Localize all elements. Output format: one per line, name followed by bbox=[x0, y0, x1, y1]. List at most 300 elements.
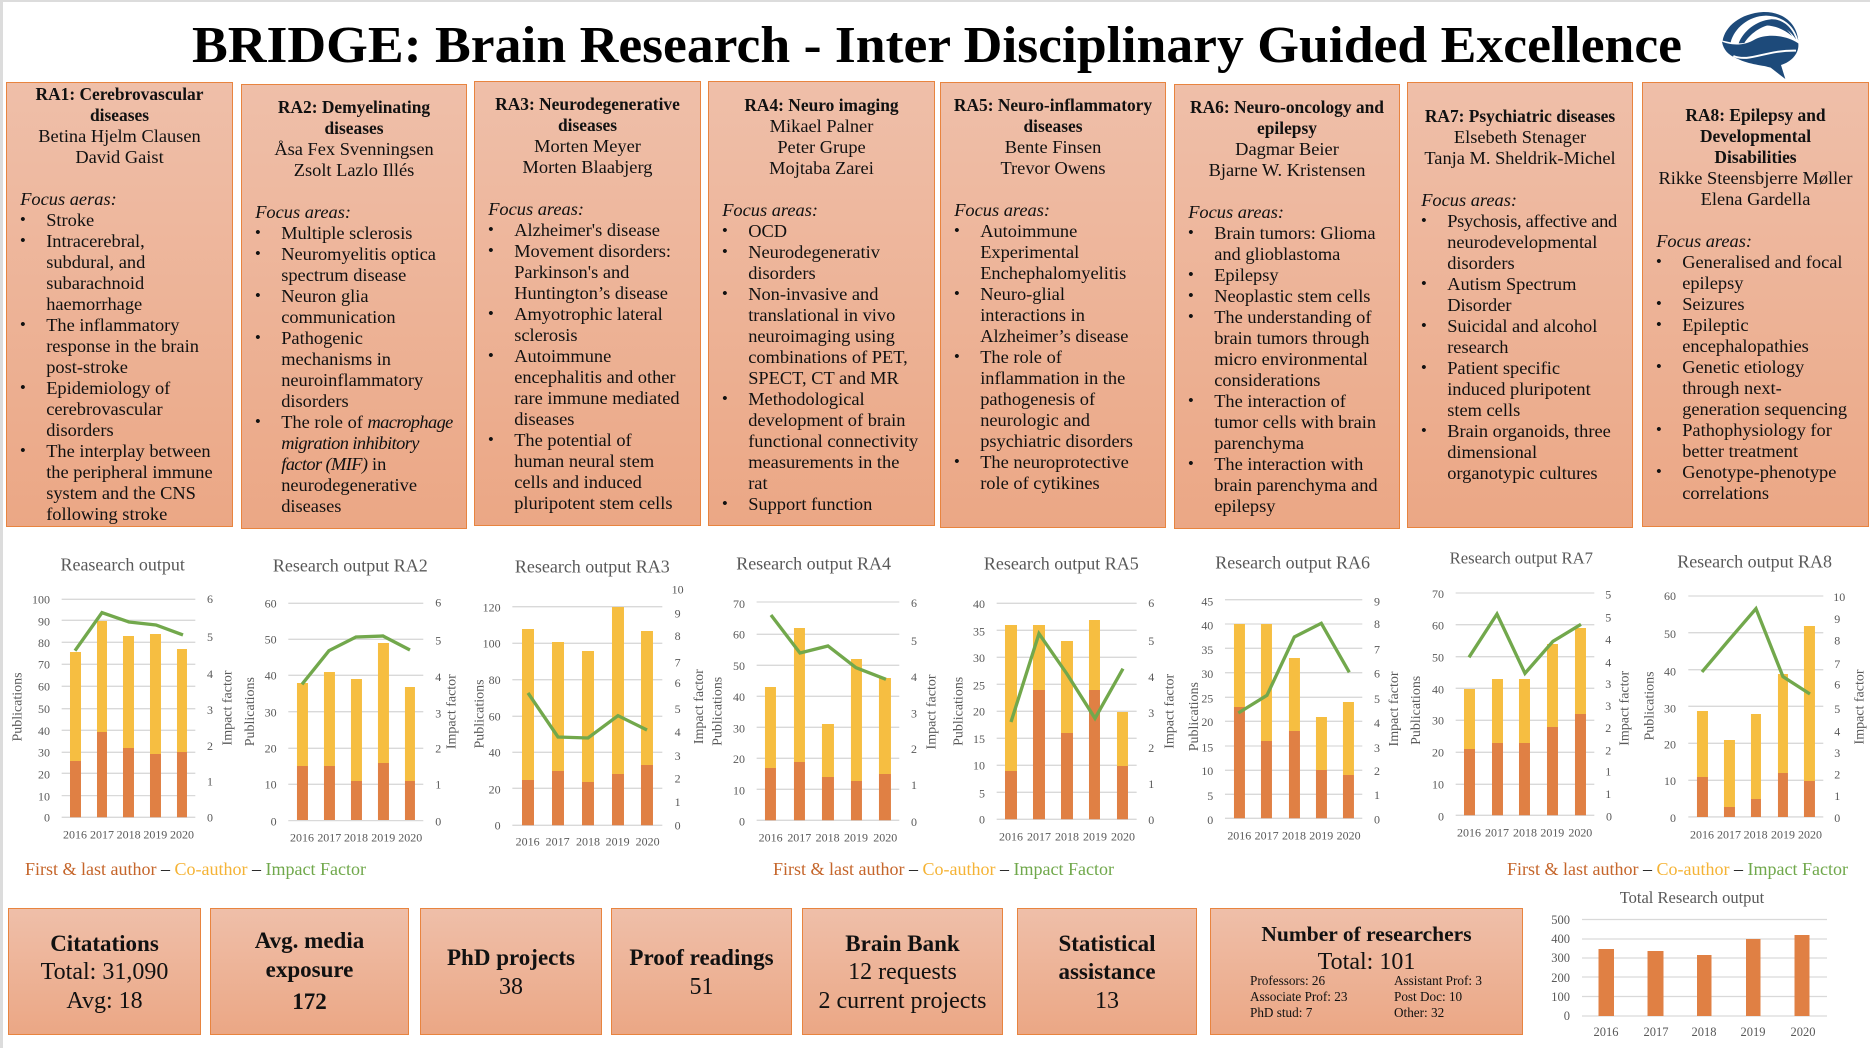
year labels: 2019 bbox=[143, 827, 167, 841]
left axis labels: 30 bbox=[1201, 667, 1213, 681]
list: RA4 focus areas bbox=[722, 221, 918, 514]
chart: Research output RA8 bbox=[1642, 552, 1867, 842]
list: RA2 focus areas: communication bbox=[281, 306, 396, 326]
impact factor axis title: Impact factor bbox=[1387, 671, 1402, 746]
list: RA6 focus areas: brain tumors through bbox=[1214, 328, 1369, 348]
list: RA2 focus areas bbox=[256, 222, 453, 516]
right axis labels: 2 bbox=[675, 772, 681, 786]
stat panel: number of researchers bbox=[1210, 908, 1523, 1035]
list: RA8 focus areas: Seizures bbox=[1682, 294, 1744, 314]
list: RA6 focus areas: Epilepsy bbox=[1214, 265, 1279, 285]
list: RA5 focus areas: pathogenesis of bbox=[980, 389, 1095, 409]
researcher breakdown column 1: Professors: 26 bbox=[1250, 973, 1325, 988]
heading: RA3 title and leaders: Morten Blaabjerg bbox=[523, 157, 652, 177]
list: RA1 focus areas: system and the CNS bbox=[46, 483, 196, 503]
co-author bars bbox=[1697, 626, 1815, 807]
chart title: Research output RA4 bbox=[736, 554, 891, 574]
left axis labels: 25 bbox=[1201, 692, 1213, 706]
panel: RA3 Neurodegenerative diseases bbox=[474, 81, 701, 526]
left axis labels bbox=[32, 592, 50, 825]
heading: RA6 title and leaders: epilepsy bbox=[1257, 118, 1317, 138]
year labels: 2017 bbox=[1717, 828, 1741, 842]
list: RA8 focus areas: Generalised and focal bbox=[1682, 252, 1843, 272]
left axis labels: 0 bbox=[1670, 811, 1676, 825]
heading: RA4 title and leaders: RA4: Neuro imaging bbox=[744, 95, 899, 115]
year labels: 2018 bbox=[1282, 828, 1306, 842]
heading: RA7 title and leaders: RA7: Psychiatric diseases bbox=[1425, 106, 1615, 126]
right axis labels: 2 bbox=[1374, 764, 1380, 778]
list: RA1 focus areas: disorders bbox=[46, 420, 114, 440]
year labels: 2020 bbox=[170, 827, 194, 841]
heading: RA8 title and leaders bbox=[1658, 105, 1853, 209]
list: RA4 focus areas: measurements in the bbox=[748, 452, 899, 472]
label: focus areas RA3: Focus areas: bbox=[488, 199, 584, 219]
right axis labels: 7 bbox=[1374, 643, 1380, 657]
heading: RA5 title and leaders bbox=[954, 95, 1152, 178]
year labels: 2020 bbox=[636, 834, 660, 848]
chart title: Research output RA3 bbox=[515, 556, 670, 576]
list: RA7 focus areas: Disorder bbox=[1447, 295, 1512, 315]
left axis labels: 0 bbox=[1564, 1009, 1570, 1023]
right axis labels: 6 bbox=[675, 676, 681, 690]
label: focus areas RA5: Focus areas: bbox=[954, 200, 1050, 220]
left axis labels: 40 bbox=[973, 597, 985, 611]
right axis labels: 7 bbox=[1834, 657, 1840, 671]
heading: RA2 title and leaders: RA2: Demyelinating bbox=[278, 96, 430, 116]
right axis labels: 7 bbox=[675, 655, 681, 669]
left axis labels: 50 bbox=[1432, 651, 1444, 665]
list: RA3 focus areas: human neural stem bbox=[514, 451, 654, 471]
left axis labels: 10 bbox=[38, 789, 50, 803]
stat panel: citations bbox=[8, 908, 201, 1035]
list: RA6 focus areas: The interaction of bbox=[1214, 391, 1346, 411]
heading: RA6 title and leaders: Dagmar Beier bbox=[1235, 139, 1339, 159]
year labels: 2017 bbox=[1644, 1025, 1668, 1039]
left axis labels: 20 bbox=[1201, 715, 1213, 729]
right axis labels: 1 bbox=[1605, 765, 1611, 779]
list: RA8 focus areas bbox=[1656, 252, 1847, 503]
stat panel: number of researchers: Total: 101 bbox=[1318, 948, 1415, 974]
impact factor axis title: Impact factor bbox=[692, 669, 707, 744]
co-author bars bbox=[1464, 628, 1586, 749]
left axis labels: 10 bbox=[733, 783, 745, 797]
right axis labels: 1 bbox=[911, 778, 917, 792]
publications axis title: Publications bbox=[1409, 676, 1424, 745]
list: RA1 focus areas: following stroke bbox=[46, 504, 167, 524]
year labels: 2019 bbox=[1309, 828, 1333, 842]
year labels bbox=[63, 827, 194, 841]
left axis labels bbox=[1664, 589, 1676, 825]
year labels bbox=[759, 830, 897, 844]
right axis labels: 6 bbox=[435, 596, 441, 610]
list: RA7 focus areas: disorders bbox=[1447, 253, 1515, 273]
heading: RA3 title and leaders: Morten Meyer bbox=[534, 136, 641, 156]
list: RA1 focus areas: subdural, and bbox=[46, 252, 145, 272]
year labels: 2016 bbox=[516, 834, 540, 848]
impact factor line bbox=[1469, 614, 1581, 673]
impact factor line bbox=[1238, 623, 1349, 713]
stat panel: statistical assistance: assistance bbox=[1058, 959, 1156, 984]
year labels: 2018 bbox=[344, 830, 368, 844]
impact factor line bbox=[302, 636, 410, 684]
stat panel: proof readings: Proof readings bbox=[629, 945, 774, 970]
left axis labels: 60 bbox=[733, 628, 745, 642]
left axis labels: 10 bbox=[1664, 774, 1676, 788]
right axis labels bbox=[1374, 594, 1380, 827]
list: RA3 focus areas: Autoimmune bbox=[514, 346, 611, 366]
right axis labels: 4 bbox=[1834, 724, 1840, 738]
stat panel: statistical assistance: Statistical bbox=[1058, 931, 1156, 956]
chart title: Research output RA7 bbox=[1450, 549, 1593, 568]
chart: Research output RA3 bbox=[472, 556, 707, 848]
list: RA2 focus areas: Multiple sclerosis bbox=[281, 222, 412, 242]
left axis labels: 20 bbox=[38, 768, 50, 782]
left axis labels: 20 bbox=[1432, 746, 1444, 760]
right axis labels: 5 bbox=[1148, 634, 1154, 648]
heading: RA4 title and leaders: Peter Grupe bbox=[777, 137, 866, 157]
publications axis title: Publications bbox=[472, 679, 487, 749]
left axis labels: 60 bbox=[1664, 589, 1676, 603]
left axis labels: 35 bbox=[973, 624, 985, 638]
right axis labels: 5 bbox=[675, 702, 681, 716]
year labels bbox=[999, 829, 1135, 843]
right axis labels: 5 bbox=[207, 630, 213, 644]
year labels: 2019 bbox=[371, 830, 395, 844]
right axis labels: 3 bbox=[1834, 746, 1840, 760]
year labels: 2019 bbox=[1740, 1025, 1766, 1039]
year labels: 2017 bbox=[546, 834, 570, 848]
right axis labels: 5 bbox=[1374, 692, 1380, 706]
publications axis title: Publications bbox=[243, 677, 258, 746]
list: RA5 focus areas: inflammation in the bbox=[980, 368, 1125, 388]
impact factor line bbox=[771, 615, 886, 679]
year labels: 2020 bbox=[1111, 829, 1135, 843]
right axis labels: 3 bbox=[1148, 706, 1154, 720]
right axis labels: 0 bbox=[1148, 813, 1154, 827]
list: RA1 focus areas: The interplay between bbox=[46, 441, 211, 461]
list: RA1 focus areas: subarachnoid bbox=[46, 273, 144, 293]
label: focus areas RA4: Focus areas: bbox=[722, 200, 818, 220]
right axis labels: 2 bbox=[1148, 741, 1154, 755]
list: RA7 focus areas: Psychosis, affective and bbox=[1447, 211, 1617, 231]
year labels: 2019 bbox=[1540, 826, 1564, 840]
list: RA3 focus areas: pluripotent stem cells bbox=[514, 493, 673, 513]
left axis labels: 30 bbox=[973, 651, 985, 665]
right axis labels: 1 bbox=[1834, 789, 1840, 803]
list: RA8 focus areas: Pathophysiology for bbox=[1682, 420, 1832, 440]
list: RA8 focus areas: Epileptic bbox=[1682, 315, 1749, 335]
left axis labels: 70 bbox=[733, 597, 745, 611]
right axis labels: 0 bbox=[1374, 813, 1380, 827]
right axis labels: 8 bbox=[1834, 633, 1840, 647]
right axis labels: 2 bbox=[1605, 743, 1611, 757]
left axis labels: 120 bbox=[483, 601, 501, 615]
panel: RA8 Epilepsy and Developmental Disabilities bbox=[1642, 82, 1869, 527]
heading: RA7 title and leaders bbox=[1424, 106, 1616, 168]
legend 1: First & last author – Co-author – Impact Factor bbox=[25, 859, 366, 879]
list: RA5 focus areas: interactions in bbox=[980, 305, 1085, 325]
chart: Research output RA5 bbox=[951, 554, 1177, 843]
right axis labels: 4 bbox=[1605, 655, 1611, 669]
co-author bars bbox=[765, 628, 891, 781]
left axis labels: 10 bbox=[265, 778, 277, 792]
list: RA8 focus areas: correlations bbox=[1682, 483, 1769, 503]
left axis labels: 30 bbox=[265, 706, 277, 720]
impact factor line bbox=[75, 613, 183, 651]
heading: RA1 title and leaders: RA1: Cerebrovascular bbox=[36, 84, 203, 104]
heading: RA4 title and leaders bbox=[744, 95, 899, 178]
heading: RA4 title and leaders: Mikael Palner bbox=[770, 116, 873, 136]
year labels: 2017 bbox=[90, 827, 114, 841]
right axis labels: 0 bbox=[1834, 811, 1840, 825]
list: RA3 focus areas: sclerosis bbox=[514, 325, 578, 345]
left axis labels: 50 bbox=[265, 633, 277, 647]
left axis labels bbox=[265, 596, 277, 829]
list: RA2 focus areas: factor (MIF) in bbox=[281, 454, 386, 474]
right axis labels: 3 bbox=[1374, 741, 1380, 755]
chart: Research output RA7 bbox=[1409, 549, 1633, 840]
stat panel: proof readings: 51 bbox=[690, 974, 714, 1000]
list: RA6 focus areas: brain parenchyma and bbox=[1214, 475, 1378, 495]
left axis labels bbox=[1551, 913, 1570, 1023]
label: focus areas RA6: Focus areas: bbox=[1188, 202, 1284, 222]
year labels bbox=[290, 830, 422, 844]
first and last author bars bbox=[70, 732, 187, 817]
year labels: 2019 bbox=[606, 834, 630, 848]
right axis labels: 1 bbox=[1374, 788, 1380, 802]
right axis labels: 4 bbox=[1374, 716, 1380, 730]
list: RA3 focus areas: Movement disorders: bbox=[514, 241, 671, 261]
left axis labels: 40 bbox=[1432, 683, 1444, 697]
panel: RA4 Neuro imaging bbox=[708, 81, 935, 526]
list: RA2 focus areas: spectrum disease bbox=[281, 264, 406, 284]
stat panel: citations: Avg: 18 bbox=[66, 988, 143, 1014]
heading: RA2 title and leaders: diseases bbox=[325, 118, 383, 138]
left axis labels: 100 bbox=[483, 637, 501, 651]
chart: Research output RA6 bbox=[1187, 553, 1402, 842]
researcher breakdown column 1: Associate Prof: 23 bbox=[1250, 989, 1347, 1004]
list: RA7 focus areas: research bbox=[1447, 337, 1508, 357]
panel: RA7 Psychiatric diseases bbox=[1407, 82, 1633, 528]
left axis labels: 70 bbox=[38, 658, 50, 672]
list: RA2 focus areas: diseases bbox=[281, 496, 341, 516]
list: RA2 focus areas: disorders bbox=[281, 390, 349, 410]
left axis labels: 30 bbox=[1432, 714, 1444, 728]
left axis labels bbox=[733, 597, 745, 829]
heading: RA1 title and leaders: Betina Hjelm Clausen bbox=[38, 126, 201, 146]
researcher breakdown column 2: Post Doc: 10 bbox=[1394, 989, 1462, 1004]
heading: RA8 title and leaders: Disabilities bbox=[1714, 147, 1797, 167]
list: RA4 focus areas: OCD bbox=[748, 221, 787, 241]
left axis labels: 0 bbox=[979, 813, 985, 827]
left axis labels: 300 bbox=[1551, 951, 1570, 965]
year labels: 2019 bbox=[844, 830, 868, 844]
heading: RA6 title and leaders bbox=[1190, 97, 1384, 180]
list: RA4 focus areas: SPECT, CT and MR bbox=[748, 368, 899, 388]
list: RA4 focus areas: combinations of PET, bbox=[748, 347, 908, 367]
left axis labels: 50 bbox=[1664, 627, 1676, 641]
list: RA4 focus areas: functional connectivity bbox=[748, 431, 918, 451]
impact factor axis title: Impact factor bbox=[445, 674, 460, 749]
stat panel: statistical assistance: 13 bbox=[1095, 988, 1119, 1014]
right axis labels: 3 bbox=[207, 703, 213, 717]
list: RA6 focus areas: The interaction with bbox=[1214, 454, 1363, 474]
left axis labels bbox=[973, 597, 985, 827]
right axis labels: 0 bbox=[435, 815, 441, 829]
stat panel: brain bank: Brain Bank bbox=[845, 931, 960, 956]
list: RA1 focus areas: response in the brain bbox=[46, 336, 199, 356]
list: RA6 focus areas: and glioblastoma bbox=[1214, 244, 1340, 264]
list: RA1 focus areas: Epidemiology of bbox=[46, 378, 170, 398]
panel: RA5 Neuro-inflammatory diseases bbox=[940, 82, 1166, 528]
year labels: 2016 bbox=[63, 827, 87, 841]
right axis labels bbox=[911, 596, 917, 829]
list: RA3 focus areas: encephalitis and other bbox=[514, 367, 676, 387]
year labels: 2018 bbox=[117, 827, 141, 841]
right axis labels bbox=[435, 596, 441, 829]
list: RA5 focus areas: neurologic and bbox=[980, 410, 1090, 430]
list: RA4 focus areas: Non-invasive and bbox=[748, 284, 878, 304]
list: RA1 focus areas: haemorrhage bbox=[46, 294, 142, 314]
list: RA5 focus areas: Autoimmune bbox=[980, 221, 1077, 241]
researcher breakdown column 2: Other: 32 bbox=[1394, 1005, 1444, 1020]
chart: Research output RA2 bbox=[243, 556, 460, 844]
list: RA6 focus areas: Neoplastic stem cells bbox=[1214, 286, 1370, 306]
right axis labels: 3 bbox=[1605, 699, 1611, 713]
heading: RA7 title and leaders: Elsebeth Stenager bbox=[1454, 127, 1586, 147]
left axis labels: 50 bbox=[38, 702, 50, 716]
right axis labels: 1 bbox=[1148, 777, 1154, 791]
list: RA4 focus areas: Methodological bbox=[748, 389, 865, 409]
chart title: Research output RA6 bbox=[1215, 553, 1370, 573]
year labels: 2020 bbox=[1790, 1025, 1816, 1039]
list: RA1 focus areas bbox=[20, 210, 213, 524]
left axis labels: 40 bbox=[265, 669, 277, 683]
heading: RA1 title and leaders: David Gaist bbox=[75, 147, 164, 167]
right axis labels: 5 bbox=[911, 634, 917, 648]
right axis labels: 8 bbox=[675, 629, 681, 643]
year labels: 2018 bbox=[1744, 828, 1768, 842]
impact factor axis title: Impact factor bbox=[1618, 671, 1633, 746]
right axis labels: 8 bbox=[1374, 617, 1380, 631]
list: RA8 focus areas: Genetic etiology bbox=[1682, 357, 1804, 377]
heading: RA5 title and leaders: RA5: Neuro-inflammatory bbox=[954, 95, 1152, 115]
stat panel: brain bank: 12 requests bbox=[848, 959, 957, 985]
publications axis title: Publications bbox=[951, 677, 966, 746]
left axis labels: 40 bbox=[489, 746, 501, 760]
first and last author bars bbox=[765, 762, 891, 820]
list: RA5 focus areas: Enchephalomyelitis bbox=[980, 263, 1126, 283]
list: RA1 focus areas: Stroke bbox=[46, 210, 94, 230]
left axis labels: 200 bbox=[1551, 971, 1570, 985]
right axis labels: 3 bbox=[1605, 677, 1611, 691]
list: RA2 focus areas: mechanisms in bbox=[281, 348, 391, 368]
co-author bars bbox=[1005, 620, 1128, 771]
panel: RA1 Cerebrovascular diseases bbox=[6, 82, 233, 527]
list: RA2 focus areas: Neuromyelitis optica bbox=[281, 244, 436, 264]
stat panel: citations: Total: 31,090 bbox=[41, 959, 168, 985]
panel: RA6 Neuro-oncology and epilepsy bbox=[1174, 84, 1400, 529]
list: RA1 focus areas: The inflammatory bbox=[46, 315, 179, 335]
impact factor line bbox=[1702, 609, 1810, 694]
year labels: 2017 bbox=[1027, 829, 1051, 843]
left axis labels: 0 bbox=[1207, 813, 1213, 827]
chart: Research output RA4 bbox=[710, 554, 940, 844]
stat panel: proof readings bbox=[611, 908, 792, 1035]
list: RA3 focus areas: The potential of bbox=[514, 430, 632, 450]
right axis labels: 3 bbox=[675, 749, 681, 763]
left axis labels: 40 bbox=[1201, 618, 1213, 632]
impact factor line bbox=[1011, 634, 1123, 722]
co-author bars bbox=[297, 643, 415, 781]
left axis labels: 40 bbox=[1664, 664, 1676, 678]
left axis labels: 5 bbox=[1207, 789, 1213, 803]
right axis labels: 5 bbox=[435, 634, 441, 648]
year labels: 2016 bbox=[1457, 826, 1481, 840]
right axis labels: 2 bbox=[1605, 721, 1611, 735]
year labels: 2020 bbox=[873, 830, 897, 844]
right axis labels: 10 bbox=[1833, 590, 1845, 604]
panel: RA2 Demyelinating diseases bbox=[241, 84, 467, 529]
left axis labels: 60 bbox=[265, 596, 277, 610]
heading: RA5 title and leaders: Trevor Owens bbox=[1000, 158, 1106, 178]
publications axis title: Publications bbox=[11, 672, 26, 742]
right axis labels: 2 bbox=[1834, 767, 1840, 781]
year labels: 2019 bbox=[1771, 828, 1795, 842]
left axis labels: 90 bbox=[38, 615, 50, 629]
heading: RA2 title and leaders: Zsolt Lazlo Illés bbox=[294, 160, 414, 180]
chart: Reasearch output (RA1) bbox=[11, 555, 236, 841]
right axis labels: 3 bbox=[435, 706, 441, 720]
stat panel: media exposure: Avg. media bbox=[255, 928, 364, 953]
left axis labels: 0 bbox=[495, 819, 501, 833]
left axis labels: 100 bbox=[32, 592, 50, 606]
year labels: 2016 bbox=[1594, 1025, 1618, 1039]
right axis labels: 9 bbox=[675, 607, 681, 621]
left axis labels: 20 bbox=[973, 705, 985, 719]
right axis labels: 1 bbox=[435, 778, 441, 792]
stat panel: media exposure: 172 bbox=[292, 989, 327, 1014]
left axis labels: 50 bbox=[733, 659, 745, 673]
heading: RA8 title and leaders: RA8: Epilepsy and bbox=[1685, 105, 1826, 125]
left axis labels: 10 bbox=[1201, 764, 1213, 778]
right axis labels: 9 bbox=[1374, 594, 1380, 608]
heading: RA8 title and leaders: Developmental bbox=[1700, 126, 1811, 146]
right axis labels: 4 bbox=[911, 670, 917, 684]
heading: RA7 title and leaders: Tanja M. Sheldrik-Michel bbox=[1424, 148, 1616, 168]
co-author bars bbox=[1234, 624, 1354, 775]
year labels: 2016 bbox=[1690, 828, 1714, 842]
right axis labels: 6 bbox=[1374, 666, 1380, 680]
list: RA6 focus areas bbox=[1188, 223, 1378, 516]
heading: RA8 title and leaders: Rikke Steensbjerre Møller bbox=[1658, 168, 1853, 188]
right axis labels: 4 bbox=[675, 725, 681, 739]
left axis labels: 60 bbox=[1432, 618, 1444, 632]
researcher breakdown column 1 bbox=[1250, 973, 1347, 1020]
left axis labels: 20 bbox=[1664, 738, 1676, 752]
left axis labels: 60 bbox=[38, 679, 50, 693]
year labels: 2018 bbox=[816, 830, 840, 844]
impact factor axis title: Impact factor bbox=[925, 674, 940, 749]
list: RA2 focus areas: neurodegenerative bbox=[281, 474, 417, 494]
left axis labels: 400 bbox=[1551, 932, 1570, 946]
list: RA6 focus areas: The understanding of bbox=[1214, 307, 1372, 327]
right axis labels: 5 bbox=[1605, 588, 1611, 602]
list: RA5 focus areas: The role of bbox=[980, 347, 1062, 367]
right axis labels: 0 bbox=[207, 810, 213, 824]
year labels bbox=[1690, 828, 1822, 842]
right axis labels: 4 bbox=[1148, 670, 1154, 684]
